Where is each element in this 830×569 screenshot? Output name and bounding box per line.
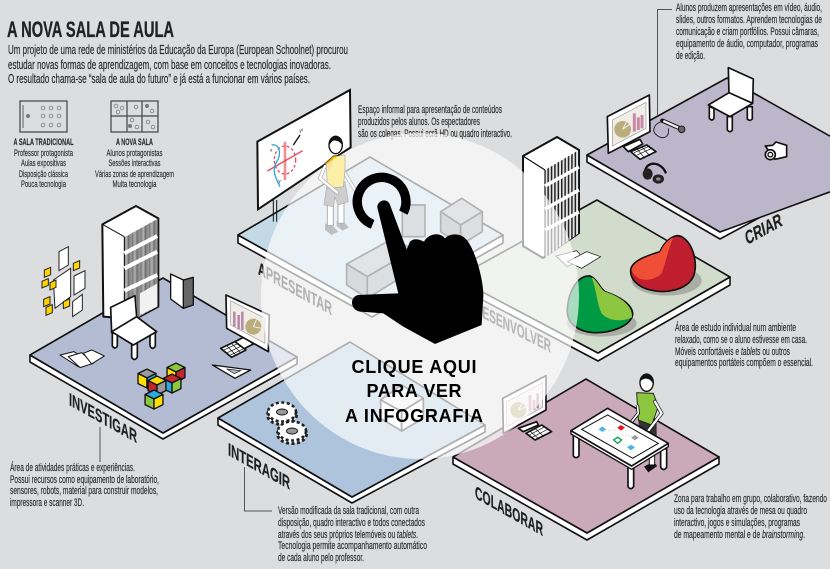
panel: criar [587, 68, 830, 250]
label: desenvolver: DESENVOLVER [475, 299, 551, 358]
caption: new classroom: Alunos protagonistas [106, 148, 163, 159]
icon: gears [268, 402, 306, 444]
whiteboard: y² [299, 128, 304, 133]
call to action: A INFOGRAFIA [345, 406, 483, 426]
student at table [632, 374, 662, 472]
interactive table [571, 408, 668, 489]
intro text: O resultado chama-se “sala de aula do futuro” e já está a funcionar em vários países. [8, 72, 310, 86]
diagram: new classroom [111, 101, 158, 132]
text: investigar [10, 461, 159, 509]
text: investigar: Possui recursos como equipamento de laboratório, [10, 474, 159, 486]
text: interagir: disposição, quadro interactivo e todos conectados [278, 517, 425, 529]
caption: traditional classroom: A SALA TRADICIONAL [14, 137, 74, 148]
caption: new classroom: A NOVA SALA [116, 137, 153, 148]
text: criar: de edição. [676, 50, 705, 62]
label: criar: CRIAR [743, 210, 784, 250]
text: investigar: Área de atividades práticas e experiências. [10, 461, 135, 474]
call to action: PARA VER [366, 381, 462, 401]
panel: interagir [218, 342, 485, 503]
diagram: traditional classroom [20, 101, 67, 132]
label: interagir: INTERAGIR [228, 439, 290, 494]
panel: colaborar [453, 374, 719, 541]
leader line: investigar [99, 427, 101, 462]
icon: bookcase [523, 137, 579, 258]
text: apresentar: Espaço informal para apresentação de conteúdos [358, 104, 502, 116]
icon: chair criar [708, 68, 753, 132]
whiteboard [257, 90, 351, 222]
caption: traditional classroom: Aulas expositivas [21, 158, 66, 169]
caption: new classroom: Várias zonas de aprendizagem [95, 169, 174, 180]
icon: white box [347, 198, 482, 298]
call to action: CLIQUE AQUI [352, 357, 476, 377]
icon: pointing hand [352, 177, 483, 344]
icon: monitor [221, 295, 269, 357]
call to action [345, 357, 483, 426]
intro text [8, 43, 348, 86]
icon: papers [556, 251, 601, 268]
label: investigar: INVESTIGAR [69, 389, 137, 448]
caption: traditional classroom: Pouca tecnologia [21, 179, 66, 190]
text: interagir [278, 505, 427, 564]
text: apresentar: são os colegas. Possui ecrã HD ou quadro interactivo. [358, 128, 512, 140]
icon: book [171, 274, 193, 308]
text: interagir: através dos seus próprios telemóveis ou tablets. [278, 529, 418, 541]
icon: camera [765, 142, 787, 160]
intro text: Um projeto de uma rede de ministérios da Educação da Europa (European Schoolnet) procurou [8, 43, 348, 57]
caption: traditional classroom [14, 137, 74, 190]
label: colaborar: COLABORAR [475, 482, 543, 541]
panel: investigar [30, 206, 297, 448]
whiteboard: y [278, 179, 281, 184]
panel: desenvolver [456, 137, 730, 361]
icon: bookcase [102, 206, 158, 325]
text: interagir: de cada aluno pelo professor. [278, 552, 364, 564]
icon: chair [111, 296, 157, 359]
caption: new classroom: Muita tecnologia [112, 179, 157, 190]
text: investigar: impressora e scanner 3D. [10, 497, 84, 509]
caption: new classroom: Sessões interactivas [108, 158, 161, 169]
click overlay circle [261, 133, 579, 459]
icon: green beanbag [567, 276, 637, 337]
text: interagir: Versão modificada da sala tradicional, com outra [278, 505, 420, 517]
caption: new classroom [95, 137, 174, 190]
label: apresentar: APRESENTAR [258, 258, 332, 320]
text: interagir: Tecnologia permite acompanhamento automático [278, 540, 427, 552]
whiteboard: x [270, 148, 273, 153]
caption: traditional classroom: Professor protagonista [14, 148, 73, 159]
intro text: estudar novas formas de aprendizagem, com base em conceitos e tecnologias inovadoras. [8, 58, 331, 72]
icon: monitor criar [607, 95, 656, 159]
title: A NOVA SALA DE AULA [7, 17, 174, 42]
icon: headphones [643, 164, 666, 184]
text: apresentar [358, 104, 512, 140]
icon: set square [212, 365, 251, 378]
text: investigar: sensores, robots, material para construir modelos, [10, 485, 158, 497]
student presenting [320, 136, 355, 235]
text: colaborar [674, 493, 827, 541]
text: desenvolver [675, 321, 813, 369]
icon: red beanbag [631, 236, 702, 296]
leader line: criar [658, 10, 672, 115]
text: colaborar: de mapeamento mental e de brainstorming. [674, 529, 805, 541]
icon: microphone [654, 121, 685, 138]
text: criar [676, 2, 822, 62]
caption: traditional classroom: Disposição clássica [19, 169, 68, 180]
leader line: interagir [244, 467, 272, 511]
text: desenvolver: Móveis confortáveis e tablets ou outros [675, 346, 790, 358]
icon: coloured cubes [138, 363, 185, 409]
icon: papers [60, 350, 104, 368]
text: apresentar: produzidos pelos alunos. Os espectadores [358, 116, 480, 128]
icon: monitor [503, 376, 552, 440]
icon: sticky notes [42, 247, 85, 317]
icon: cube [381, 385, 423, 431]
panel: apresentar [238, 90, 503, 320]
